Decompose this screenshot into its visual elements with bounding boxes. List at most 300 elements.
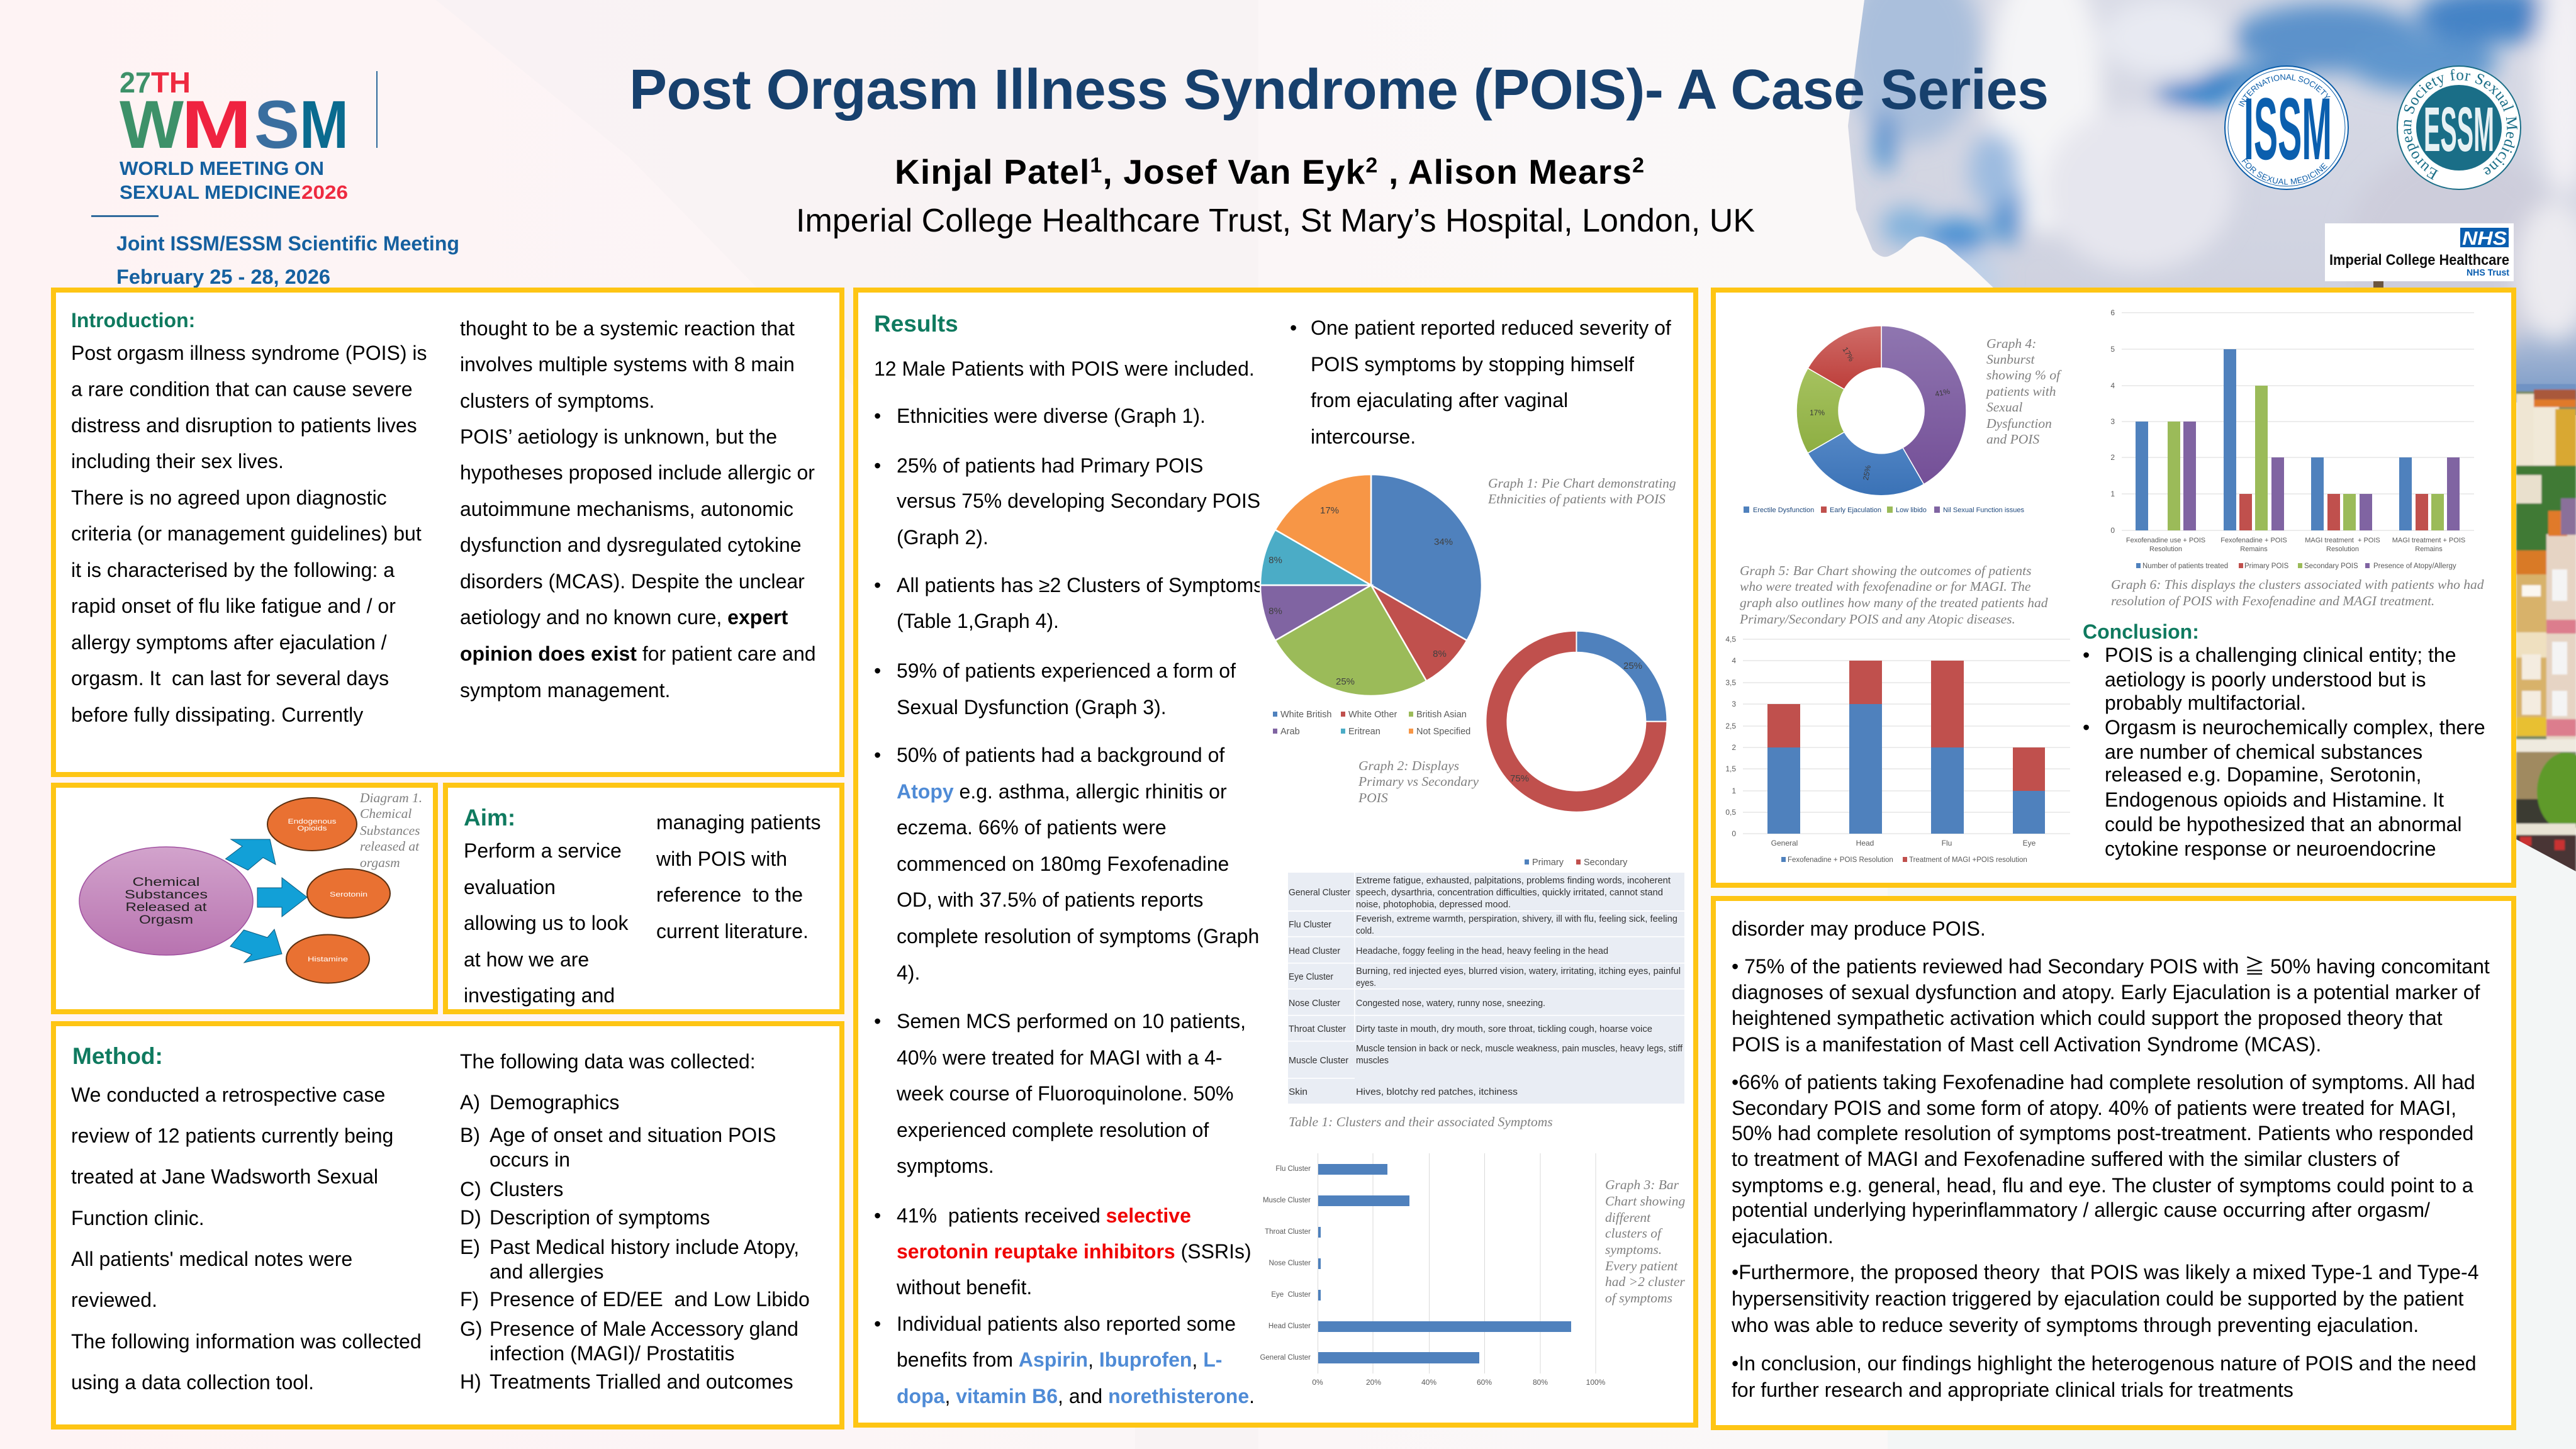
logo: ISSM: FOR SEXUAL MEDICINE xyxy=(2241,158,2327,185)
text block: method column 1: We conducted a retrospective case xyxy=(71,1083,385,1106)
table 1: clusters and symptoms: Head Cluster xyxy=(1289,946,1340,956)
caption: graph 2 xyxy=(1358,758,1479,805)
doughnut chart: graph 2 primary vs secondary: 25% xyxy=(1623,661,1642,671)
node: serotonin: Serotonin xyxy=(330,891,367,898)
heading: Results: Results xyxy=(874,311,958,337)
panel: method xyxy=(53,1024,842,1427)
text block: results column 2: • xyxy=(1290,316,1297,339)
table 1: clusters and symptoms: muscles xyxy=(1356,1055,1389,1066)
text block: introduction column 1: orgasm. It can last for several days xyxy=(71,667,389,690)
text block: results column 1: Sexual Dysfunction (Graph 3). xyxy=(897,696,1167,719)
table 1: clusters and symptoms: Burning, red injected eyes, blurred vision, watery, irritating, itching eyes, painful xyxy=(1356,966,1681,976)
text block: results column 1: week course of Fluoroquinolone. 50% xyxy=(896,1082,1233,1105)
text block: discussion: potential underlying hyperinflammatory / allergic cause occurring after orgasm/ xyxy=(1732,1199,2430,1221)
text block: discussion: disorder may produce POIS. xyxy=(1732,917,1986,940)
text block: results column 1: without benefit. xyxy=(896,1276,1032,1299)
stacked bar chart: graph 5 clusters by treatment: 2,5 xyxy=(1725,722,1736,730)
text block: method column 2: Age of onset and situation POIS xyxy=(490,1124,776,1146)
text block: discussion: •In conclusion, our findings highlight the heterogenous nature of POIS and the need xyxy=(1732,1352,2477,1375)
caption: graph 3: clusters of xyxy=(1605,1226,1663,1241)
bar chart: graph 6 treatment outcomes: MAGI treatment + POIS xyxy=(2305,537,2380,544)
text block: introduction column 2: disorders (MCAS). Despite the unclear xyxy=(460,570,805,593)
pie chart: graph 1 ethnicities: White British xyxy=(1280,710,1331,720)
text block: introduction column 1: a rare condition that can cause severe xyxy=(71,378,413,400)
sunburst chart: graph 4 sexual dysfunction: 25% xyxy=(1861,464,1873,481)
bar chart: graph 6 treatment outcomes: MAGI treatment + POIS xyxy=(2392,537,2465,544)
bar chart: graph 3 clusters: Nose Cluster xyxy=(1269,1260,1311,1267)
authors: 2 xyxy=(1632,154,1644,177)
text block: results column 1: (Table 1,Graph 4). xyxy=(897,610,1059,632)
table 1: clusters and symptoms: Feverish, extreme warmth, perspiration, shivery, ill with flu, feeling sick, feeling xyxy=(1356,914,1677,924)
text block: discussion: heightened sympathetic activation which could support the proposed theory that xyxy=(1732,1007,2443,1029)
text block: conclusion: • xyxy=(2083,716,2090,739)
bar chart: graph 6 treatment outcomes xyxy=(2110,308,2474,570)
text block: introduction column 2: involves multiple systems with 8 main xyxy=(460,353,795,376)
table 1: clusters and symptoms: cold. xyxy=(1356,926,1374,936)
text block: results column 1: (Graph 2). xyxy=(897,526,988,549)
pie chart: graph 1 ethnicities: 17% xyxy=(1320,505,1339,516)
table 1: clusters and symptoms: Extreme fatigue, exhausted, palpitations, problems finding words, incoherent xyxy=(1356,875,1671,886)
node: chemical substances: Released at xyxy=(126,901,207,914)
text block: discussion: to treatment of MAGI and Fexofenadine suffered with the similar clusters of xyxy=(1732,1148,2399,1170)
text block: method column 2: C) xyxy=(460,1178,481,1200)
logo: NHS Imperial College Healthcare: NHS xyxy=(2462,227,2507,249)
table 1: clusters and symptoms: Throat Cluster xyxy=(1289,1024,1346,1034)
bar chart: graph 6 treatment outcomes: Remains xyxy=(2240,545,2268,553)
text block: results column 1: 41% patients received selective xyxy=(897,1204,1191,1227)
stacked bar chart: graph 5 clusters by treatment xyxy=(1725,635,2070,864)
text block: method column 2: and allergies xyxy=(490,1260,603,1283)
text block: conclusion: released e.g. Dopamine, Serotonin, xyxy=(2105,763,2421,786)
text block: conclusion: Orgasm is neurochemically complex, there xyxy=(2105,716,2485,739)
bar chart: graph 6 treatment outcomes: 3 xyxy=(2110,417,2115,426)
pie chart: graph 1 ethnicities: 8% xyxy=(1268,606,1282,617)
bar chart: graph 6 treatment outcomes: 6 xyxy=(2110,308,2115,317)
caption: graph 4: Graph 4: xyxy=(1986,336,2036,351)
bar chart: graph 3 clusters: Flu Cluster xyxy=(1275,1165,1311,1173)
text block: results column 2: intercourse. xyxy=(1311,425,1416,448)
text block: conclusion: Endogenous opioids and Histamine. It xyxy=(2105,788,2444,811)
text block: aim column 1: at how we are xyxy=(464,948,589,971)
stacked bar chart: graph 5 clusters by treatment: Head xyxy=(1856,839,1874,848)
text block: introduction column 2: dysfunction and dysregulated cytokine xyxy=(460,534,802,556)
bar chart: graph 6 treatment outcomes: Number of patients treated xyxy=(2142,562,2228,570)
pie chart: graph 1 ethnicities: White Other xyxy=(1348,710,1397,720)
bar chart: graph 6 treatment outcomes: 2 xyxy=(2110,453,2115,462)
text block: conclusion: • xyxy=(2083,644,2090,666)
text block: results column 1: dopa, vitamin B6, and norethisterone. xyxy=(897,1385,1255,1407)
text block: aim column 2: reference to the xyxy=(656,883,803,906)
text block: introduction column 2: autoimmune mechanisms, autonomic xyxy=(460,498,793,520)
bar chart: graph 3 clusters: 40% xyxy=(1421,1378,1436,1387)
background image: city buildings xyxy=(2516,384,2576,875)
text block: method column 1 xyxy=(71,1083,422,1394)
caption: graph 6: resolution of POIS with Fexofenadine and MAGI treatment. xyxy=(2111,593,2434,608)
text block: method column 2: H) xyxy=(460,1370,481,1393)
text block: method column 1: All patients' medical notes were xyxy=(71,1248,352,1270)
logo: NHS Imperial College Healthcare: NHS Trust xyxy=(2467,267,2509,278)
node: endogenous opioids xyxy=(267,798,357,851)
caption: graph 4: showing % of xyxy=(1986,367,2062,383)
table 1: clusters and symptoms: eyes. xyxy=(1356,978,1376,988)
node: endogenous opioids: Opioids xyxy=(297,825,327,832)
bar chart: graph 6 treatment outcomes: 4 xyxy=(2110,381,2115,390)
stacked bar chart: graph 5 clusters by treatment: 0,5 xyxy=(1725,808,1736,817)
pie chart: graph 1 ethnicities: Not Specified xyxy=(1416,727,1470,737)
text block: introduction column 2 xyxy=(460,317,816,702)
text block: method column 2: infection (MAGI)/ Prostatitis xyxy=(490,1342,734,1365)
pie chart: graph 1 ethnicities: Eritrean xyxy=(1348,727,1380,737)
text block: discussion: for further research and appropriate clinical trials for treatments xyxy=(1732,1379,2293,1401)
bar chart: graph 3 clusters: 20% xyxy=(1366,1378,1381,1387)
caption: graph 4: patients with xyxy=(1985,384,2056,399)
logo: ISSM xyxy=(2224,65,2349,190)
text block: aim column 2: managing patients xyxy=(656,811,821,834)
text block: method column 2: Presence of Male Accessory gland xyxy=(490,1318,798,1340)
text block: introduction column 1: Post orgasm illness syndrome (POIS) is xyxy=(71,342,427,364)
node: chemical substances: Chemical xyxy=(132,876,200,889)
text: ISSM xyxy=(2244,79,2332,178)
text block: method column 1: treated at Jane Wadsworth Sexual xyxy=(71,1165,378,1188)
text block: results column 1: OD, with 37.5% of patients reports xyxy=(897,888,1203,911)
text block: method column 2: Past Medical history include Atopy, xyxy=(490,1236,799,1258)
node: chemical substances: Substances xyxy=(125,888,208,902)
stacked bar chart: graph 5 clusters by treatment: 3,5 xyxy=(1725,678,1736,687)
text block: results column 1: • xyxy=(874,744,881,766)
sunburst chart: graph 4 sexual dysfunction: 17% xyxy=(1810,408,1825,417)
text block: results column 1: eczema. 66% of patients were xyxy=(897,816,1167,839)
panel: introduction xyxy=(53,290,842,775)
table 1: clusters and symptoms: Hives, blotchy red patches, itchiness xyxy=(1356,1087,1518,1097)
text block: results column 1: 59% of patients experienced a form of xyxy=(897,659,1236,682)
table 1: clusters and symptoms: Muscle tension in back or neck, muscle weakness, pain muscles, heavy legs, stiff xyxy=(1356,1043,1683,1054)
text block: results column 1: Semen MCS performed on 10 patients, xyxy=(897,1010,1246,1032)
panel: graphs and conclusion xyxy=(1713,290,2514,885)
text block: results column 1: All patients has ≥2 Clusters of Symptoms xyxy=(897,574,1263,596)
bar chart: graph 6 treatment outcomes: 0 xyxy=(2110,526,2115,535)
text block: discussion: ejaculation. xyxy=(1732,1225,1834,1248)
table 1: clusters and symptoms: Nose Cluster xyxy=(1289,998,1340,1009)
stacked bar chart: graph 5 clusters by treatment: 1 xyxy=(1732,786,1736,795)
text block: results column 1: Ethnicities were diverse (Graph 1). xyxy=(897,405,1206,427)
text block: results column 1: experienced complete resolution of xyxy=(897,1119,1209,1141)
text block: method column 1: Function clinic. xyxy=(71,1207,204,1229)
logo: ESSM: European Society for Sexual Medicine xyxy=(2404,69,2517,180)
text block: conclusion: POIS is a challenging clinical entity; the xyxy=(2105,644,2456,666)
heading: Conclusion: Conclusion: xyxy=(2083,620,2199,643)
bar chart: graph 6 treatment outcomes: Fexofenadine + POIS xyxy=(2220,537,2287,544)
WMSM 2026 logo: 2026 xyxy=(301,181,348,203)
WMSM 2026 logo: Joint ISSM/ESSM Scientific Meeting xyxy=(116,232,459,255)
panel: discussion xyxy=(1713,898,2514,1428)
node: histamine: Histamine xyxy=(308,956,348,963)
text block: results column 1: symptoms. xyxy=(897,1155,994,1177)
caption: graph 3: of symptoms xyxy=(1605,1290,1672,1306)
bar chart: graph 6 treatment outcomes: Fexofenadine use + POIS xyxy=(2126,537,2205,544)
authors: , Alison Mears xyxy=(1379,152,1632,191)
text block: introduction column 1: rapid onset of flu like fatigue and / or xyxy=(71,595,396,617)
text block: conclusion xyxy=(2083,644,2485,860)
bar chart: graph 3 clusters: 0% xyxy=(1312,1378,1323,1387)
text block: results column 1: 12 Male Patients with POIS were included. xyxy=(874,357,1255,380)
text block: discussion: • 75% of the patients reviewed had Secondary POIS with ≧ 50% having concomitant xyxy=(1732,955,2490,978)
caption: graph 3: Graph 3: Bar xyxy=(1605,1177,1679,1192)
text block: results column 1: • xyxy=(874,405,881,427)
doughnut chart: graph 2 primary vs secondary: 75% xyxy=(1510,773,1529,784)
bar chart: graph 3 clusters: Eye Cluster xyxy=(1271,1291,1311,1299)
text block: discussion: symptoms e.g. general, head, flu and eye. The cluster of symptoms could point to a xyxy=(1732,1174,2473,1197)
text block: results column 1: • xyxy=(874,659,881,682)
text block: aim column 1: evaluation xyxy=(464,876,556,898)
text block: results column 2: from ejaculating after vaginal xyxy=(1311,389,1568,411)
doughnut chart: graph 2 primary vs secondary: Primary xyxy=(1532,858,1564,868)
WMSM 2026 logo: TH xyxy=(151,66,191,99)
authors: , Josef Van Eyk xyxy=(1103,152,1365,191)
panel: aim xyxy=(445,785,842,1012)
caption: graph 6 xyxy=(2111,577,2484,608)
heading: Aim: Aim: xyxy=(464,805,515,831)
stacked bar chart: graph 5 clusters by treatment: 2 xyxy=(1732,743,1736,752)
title: Post Orgasm Illness Syndrome (POIS)- A Case Series xyxy=(629,59,2049,121)
arrows: chemical release xyxy=(225,839,307,963)
caption: graph 5: Primary/Secondary POIS and any Atopic diseases. xyxy=(1739,612,2015,627)
text block: method column 1: reviewed. xyxy=(71,1289,157,1311)
authors: 2 xyxy=(1365,154,1377,177)
text block: introduction column 1: There is no agreed upon diagnostic xyxy=(71,486,387,509)
caption: graph 4: Dysfunction xyxy=(1986,416,2052,431)
text block: method column 2: occurs in xyxy=(490,1148,570,1171)
text block: introduction column 2: POIS’ aetiology is unknown, but the xyxy=(460,425,777,448)
text block: method column 2: B) xyxy=(460,1124,480,1146)
text block: method column 2: Presence of ED/EE and Low Libido xyxy=(490,1288,810,1311)
text block: method column 2: Description of symptoms xyxy=(490,1206,710,1229)
text block: results column 1: benefits from Aspirin, Ibuprofen, L- xyxy=(897,1348,1222,1371)
table 1: clusters and symptoms: Eye Cluster xyxy=(1289,971,1333,982)
table 1: clusters and symptoms: Congested nose, watery, runny nose, sneezing. xyxy=(1356,998,1545,1009)
caption: diagram 1: Substances xyxy=(360,823,420,838)
sunburst chart: graph 4 sexual dysfunction: Nil Sexual Function issues xyxy=(1943,506,2025,514)
text block: results column 1: 40% were treated for MAGI with a 4- xyxy=(897,1046,1223,1069)
text block: results column 2: POIS symptoms by stopping himself xyxy=(1311,353,1634,376)
text block: method column 2: The following data was collected: xyxy=(460,1050,756,1073)
caption: graph 1: Ethnicities of patients with POIS xyxy=(1487,491,1666,506)
bar chart: graph 3 clusters: 80% xyxy=(1533,1378,1548,1387)
bar chart: graph 6 treatment outcomes: Resolution xyxy=(2149,545,2182,553)
stacked bar chart: graph 5 clusters by treatment: Treatment of MAGI +POIS resolution xyxy=(1909,856,2027,864)
bar chart: graph 6 treatment outcomes: 1 xyxy=(2110,490,2115,498)
pie chart: graph 1 ethnicities: 34% xyxy=(1434,537,1453,547)
text block: introduction column 2: symptom management. xyxy=(460,679,670,702)
text block: results column 1: Individual patients also reported some xyxy=(897,1312,1236,1335)
node: chemical substances xyxy=(79,847,253,955)
WMSM 2026 logo xyxy=(91,66,459,288)
caption: graph 3: symptoms. xyxy=(1605,1242,1662,1257)
text block: conclusion: aetiology is poorly understood but is xyxy=(2105,668,2426,691)
caption: graph 3: had >2 cluster xyxy=(1605,1274,1685,1289)
text block: method column 1: review of 12 patients currently being xyxy=(71,1124,393,1147)
bar chart: graph 3 clusters: Head Cluster xyxy=(1268,1323,1311,1330)
stacked bar chart: graph 5 clusters by treatment: 1,5 xyxy=(1725,764,1736,773)
text block: discussion: who was able to reduce severity of symptoms through preventing ejaculation. xyxy=(1731,1314,2419,1336)
text block: conclusion: are number of chemical substances xyxy=(2105,741,2422,763)
table 1: clusters and symptoms: Headache, foggy feeling in the head, heavy feeling in the head xyxy=(1356,946,1608,956)
text block: method column 2 xyxy=(460,1050,810,1393)
caption: diagram 1: Diagram 1. xyxy=(359,790,422,805)
text block: results column 1: • xyxy=(874,574,881,596)
text block: introduction column 2: hypotheses proposed include allergic or xyxy=(460,461,815,484)
stacked bar chart: graph 5 clusters by treatment: 3 xyxy=(1732,700,1736,708)
logo: NHS Imperial College Healthcare: Imperial College Healthcare xyxy=(2329,252,2509,269)
background image: clouds xyxy=(1844,0,2576,415)
caption: graph 5: Graph 5: Bar Chart showing the outcomes of patients xyxy=(1740,563,2031,578)
stacked bar chart: graph 5 clusters by treatment: 0 xyxy=(1732,829,1736,838)
logo: NHS Imperial College Healthcare xyxy=(2325,223,2514,288)
text block: aim column 2: with POIS with xyxy=(656,848,787,870)
bar chart: graph 6 treatment outcomes: Resolution xyxy=(2326,545,2359,553)
caption: graph 1: Graph 1: Pie Chart demonstrating xyxy=(1488,476,1676,491)
table 1: clusters and symptoms: Muscle Cluster xyxy=(1289,1055,1348,1066)
text block: method column 2: D) xyxy=(460,1206,481,1229)
text block: discussion: Secondary POIS and some form of atopy. 40% of patients were treated for MAGI, xyxy=(1732,1097,2456,1119)
caption: graph 3: different xyxy=(1605,1210,1651,1225)
text block: introduction column 1: before fully dissipating. Currently xyxy=(71,703,363,726)
caption: diagram 1 xyxy=(359,790,422,870)
text block: results column 1: 25% of patients had Primary POIS xyxy=(897,454,1203,477)
text block: discussion: •Furthermore, the proposed theory that POIS was likely a mixed Type-1 and Type-4 xyxy=(1732,1261,2479,1284)
WMSM 2026 logo: WORLD MEETING ON xyxy=(120,157,324,179)
bar chart: graph 6 treatment outcomes: 5 xyxy=(2110,345,2115,354)
text block: introduction column 2: aetiology and no known cure, expert xyxy=(460,606,788,629)
text block: method column 1: The following information was collected xyxy=(71,1330,422,1353)
caption: diagram 1: released at xyxy=(360,839,420,854)
table 1: clusters and symptoms: Flu Cluster xyxy=(1289,919,1331,930)
text block: results column 1: • xyxy=(874,1312,881,1335)
sunburst chart: graph 4 sexual dysfunction: 41% xyxy=(1934,387,1951,398)
caption: diagram 1: Chemical xyxy=(360,806,412,821)
stacked bar chart: graph 5 clusters by treatment: Flu xyxy=(1942,839,1952,848)
panel: diagram 1 xyxy=(53,785,435,1012)
text block: results column 1: commenced on 180mg Fexofenadine xyxy=(897,853,1229,875)
sunburst chart: graph 4 sexual dysfunction: Erectile Dysfunction xyxy=(1753,506,1814,514)
heading: Introduction: Introduction: xyxy=(71,309,195,332)
sunburst chart: graph 4 sexual dysfunction: Low libido xyxy=(1896,506,1927,514)
text block: aim column 1 xyxy=(464,839,629,1007)
caption: graph 3: Every patient xyxy=(1604,1258,1678,1273)
text block: results column 1: • xyxy=(874,1204,881,1227)
text block: conclusion: could be hypothesized that an abnormal xyxy=(2105,813,2461,836)
text block: introduction column 1: it is characterised by the following: a xyxy=(71,559,395,581)
caption: graph 2: Graph 2: Displays xyxy=(1358,758,1459,773)
affiliation: Imperial College Healthcare Trust, St Mary’s Hospital, London, UK xyxy=(796,203,1755,239)
table 1: clusters and symptoms: Dirty taste in mouth, dry mouth, sore throat, tickling cough, hoarse voice xyxy=(1356,1024,1652,1034)
text block: aim column 2: current literature. xyxy=(656,920,809,943)
caption: graph 4: and POIS xyxy=(1986,432,2039,447)
table 1: clusters and symptoms: noise, photophobia, depressed mood. xyxy=(1356,899,1511,910)
text block: introduction column 2: thought to be a systemic reaction that xyxy=(460,317,795,340)
text block: results column 1: • xyxy=(874,454,881,477)
WMSM 2026 logo: M xyxy=(181,86,252,162)
text block: discussion xyxy=(1731,917,2490,1401)
stacked bar chart: graph 5 clusters by treatment: 4,5 xyxy=(1725,635,1736,644)
bar chart: graph 6 treatment outcomes: Presence of Atopy/Allergy xyxy=(2373,562,2456,570)
caption: graph 6: Graph 6: This displays the clusters associated with patients who had xyxy=(2111,577,2484,592)
text block: results column 1: serotonin reuptake inhibitors (SSRIs) xyxy=(897,1240,1252,1263)
pie chart: graph 1 ethnicities: 25% xyxy=(1336,676,1355,687)
text block: method column 2: E) xyxy=(460,1236,480,1258)
caption: graph 3: Chart showing xyxy=(1605,1194,1685,1209)
sunburst chart: graph 4 sexual dysfunction: Early Ejaculation xyxy=(1830,506,1881,514)
doughnut chart: graph 2 primary vs secondary xyxy=(1486,631,1667,868)
bar chart: graph 3 clusters xyxy=(1260,1153,1606,1387)
table 1: clusters and symptoms: speech, dysarthria, concentration difficulties, quickly irritated, cannot stand xyxy=(1356,887,1663,898)
text block: results column 2 xyxy=(1290,316,1671,448)
text block: results column 1: complete resolution of symptoms (Graph xyxy=(897,925,1259,948)
bar chart: graph 3 clusters: Throat Cluster xyxy=(1265,1228,1311,1236)
text block: results column 1: Atopy e.g. asthma, allergic rhinitis or xyxy=(897,780,1227,803)
text block: introduction column 2: opinion does exist for patient care and xyxy=(460,642,816,665)
pie chart: graph 1 ethnicities: 8% xyxy=(1268,555,1282,566)
pie chart: graph 1 ethnicities: Arab xyxy=(1280,727,1300,737)
WMSM 2026 logo: 27 xyxy=(120,66,151,99)
caption: graph 3 xyxy=(1604,1177,1685,1306)
text block: results column 1: 50% of patients had a background of xyxy=(897,744,1224,766)
text block: introduction column 1: including their sex lives. xyxy=(71,450,284,473)
table 1: clusters and symptoms: Skin xyxy=(1289,1087,1308,1097)
table 1: clusters and symptoms xyxy=(1288,873,1684,1104)
doughnut chart: graph 2 primary vs secondary: Secondary xyxy=(1584,858,1628,868)
text block: method column 2: F) xyxy=(460,1288,479,1311)
caption: diagram 1: orgasm xyxy=(360,855,400,870)
text block: aim column 1: Perform a service xyxy=(464,839,622,862)
bar chart: graph 3 clusters: Muscle Cluster xyxy=(1263,1197,1311,1204)
text block: discussion: •66% of patients taking Fexofenadine had complete resolution of symptoms. All had xyxy=(1732,1071,2475,1094)
text block: aim column 2 xyxy=(656,811,821,943)
WMSM 2026 logo: M xyxy=(300,86,349,162)
caption: graph 5: who were treated with fexofenadine or for MAGI. The xyxy=(1740,579,2031,594)
text block: discussion: 50% had complete resolution of symptoms post-treatment. Patients who responded xyxy=(1732,1122,2473,1144)
text block: discussion: diagnoses of sexual dysfunction and atopy. Early Ejaculation is a potential marker of xyxy=(1732,981,2480,1004)
text block: discussion: POIS is a manifestation of Mast cell Activation Syndrome (MCAS). xyxy=(1732,1033,2321,1056)
text block: conclusion: cytokine response or neuroendocrine xyxy=(2105,837,2436,860)
stacked bar chart: graph 5 clusters by treatment: General xyxy=(1771,839,1798,848)
node: serotonin xyxy=(307,869,390,918)
text block: method column 2: G) xyxy=(460,1318,483,1340)
WMSM 2026 logo: SEXUAL MEDICINE xyxy=(120,181,301,203)
text block: results column 2: One patient reported reduced severity of xyxy=(1311,316,1671,339)
text block: results column 1 xyxy=(874,357,1263,1407)
caption: graph 2: POIS xyxy=(1358,790,1388,805)
text block: discussion: hypersensitivity reaction triggered by ejaculation could be supported by the patient xyxy=(1732,1287,2463,1310)
heading: Method: Method: xyxy=(72,1043,163,1069)
node: histamine xyxy=(286,935,369,983)
caption: graph 2: Primary vs Secondary xyxy=(1358,774,1479,789)
text block: method column 2: Clusters xyxy=(490,1178,563,1200)
stacked bar chart: graph 5 clusters by treatment: Eye xyxy=(2023,839,2036,848)
caption: graph 5 xyxy=(1739,563,2048,627)
text block: results column 1: • xyxy=(874,1010,881,1032)
authors: 1 xyxy=(1090,154,1102,177)
logo: ISSM: INTERNATIONAL SOCIETY xyxy=(2239,74,2331,107)
bar chart: graph 6 treatment outcomes: Primary POIS xyxy=(2244,562,2289,570)
caption: graph 4: Sexual xyxy=(1986,400,2022,415)
authors: Kinjal Patel xyxy=(895,152,1089,191)
caption: graph 4: Sunburst xyxy=(1986,352,2035,367)
caption: graph 5: graph also outlines how many of the treated patients had xyxy=(1740,595,2048,610)
text block: method column 2: Demographics xyxy=(490,1091,619,1114)
WMSM 2026 logo: W xyxy=(120,86,184,162)
bar chart: graph 3 clusters: General Cluster xyxy=(1260,1354,1311,1362)
text block: method column 2: A) xyxy=(460,1091,480,1114)
